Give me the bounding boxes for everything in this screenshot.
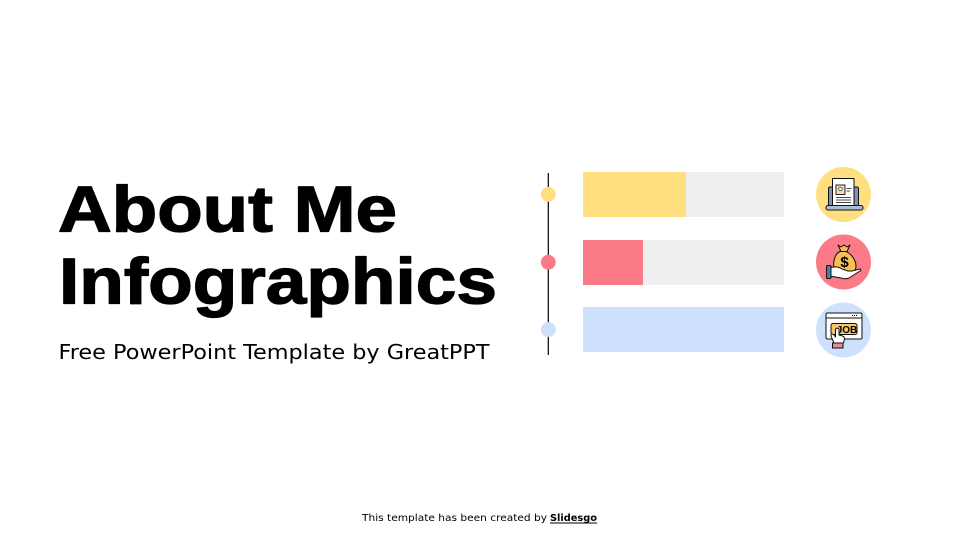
icon: resume on laptop <box>816 167 871 222</box>
subtitle: Free PowerPoint Template by GreatPPT <box>58 340 490 364</box>
icon: money bag in hand: $ <box>840 254 849 271</box>
title: Infographics <box>59 244 497 318</box>
timeline dot: red <box>541 255 556 270</box>
icon: job button click: JOB <box>837 325 857 336</box>
icon: money bag in hand <box>816 234 871 290</box>
bar 2 <box>583 240 784 285</box>
timeline dot: yellow <box>541 187 556 202</box>
title: About Me <box>58 172 397 246</box>
footer credit: This template has been created by <box>361 513 547 524</box>
bar 1 <box>583 172 784 217</box>
bar chart <box>583 172 784 352</box>
title <box>58 172 497 318</box>
timeline <box>541 173 556 355</box>
link: Slidesgo: Slidesgo <box>550 513 597 524</box>
icon: job button click <box>816 302 871 358</box>
timeline dot: blue <box>541 322 556 337</box>
bar 3 <box>583 307 784 352</box>
